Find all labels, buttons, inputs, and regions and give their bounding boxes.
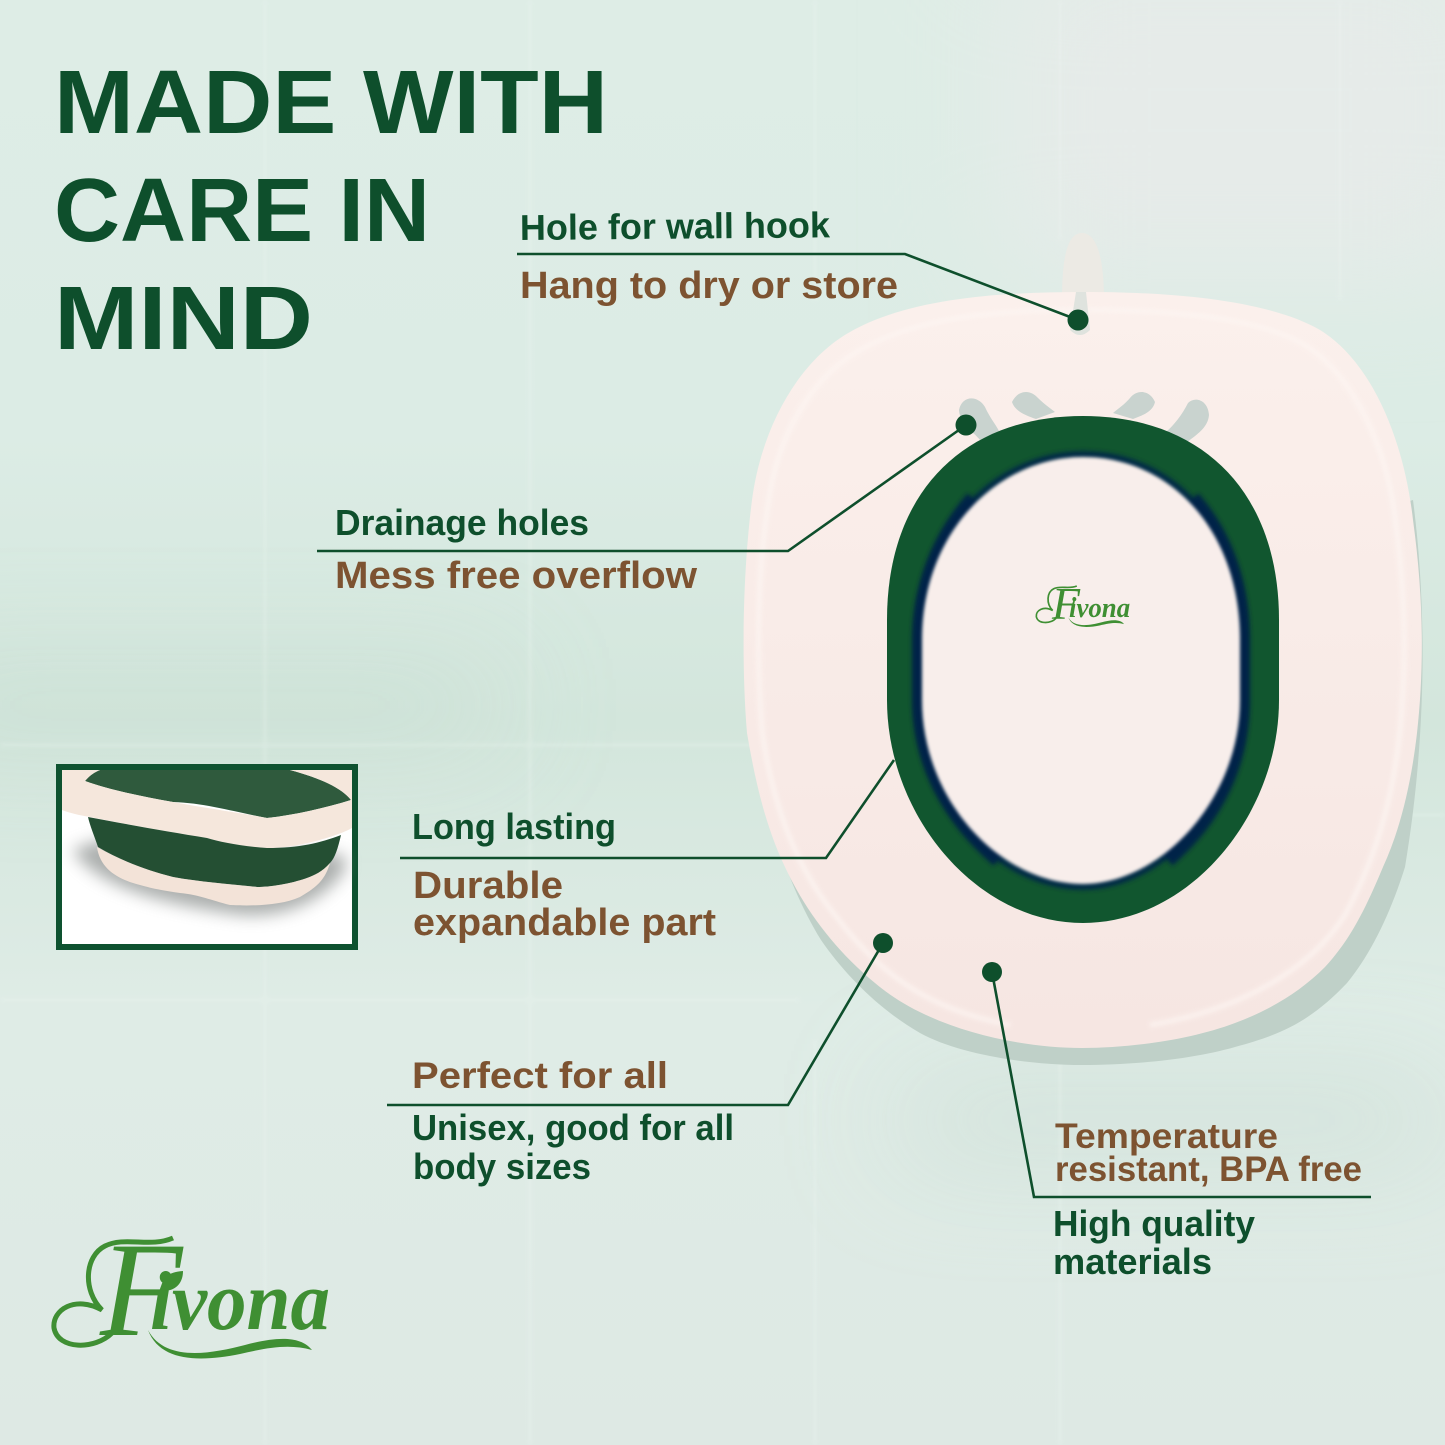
inset green band [88,817,341,887]
inset: collapsed basin side view [59,767,355,947]
callout: hole for wall hook: Hole for wall hook [520,204,831,248]
inset green interior [85,770,351,818]
title: CARE IN [54,161,430,261]
basin rim highlight [759,310,1404,1025]
logo: Fivona: F [99,1216,184,1365]
hook slot [1070,292,1090,335]
basin floor [922,457,1240,884]
callout: perfect for all: Perfect for all [412,1055,668,1096]
callout: perfect for all: Unisex, good for all [412,1107,734,1148]
callout: hole for wall hook: Hang to dry or store [520,265,898,307]
rim: green expandable ring [887,416,1279,923]
inset floor shadow [72,840,345,915]
basin shadow [750,500,1423,1065]
logo flourish [54,1238,173,1345]
callout: long lasting [400,760,894,944]
rim inner dark edge [922,457,1240,884]
inset cream base [97,847,330,905]
callout: hole for wall hook [517,204,1088,330]
callout: high quality materials: Temperature [1055,1117,1278,1156]
callout: high quality materials: High quality [1053,1203,1255,1244]
logo: small Fivona: ivona [1069,593,1130,624]
callout: high quality materials: resistant, BPA free [1055,1150,1362,1189]
product: sitz bath basin [744,233,1423,1065]
logo: small Fivona: F [1051,578,1081,629]
icon: drainage holes [959,392,1209,443]
callout: drainage holes: Mess free overflow [335,555,697,597]
callout: long lasting: Durable [413,865,563,907]
title: MADE WITH [54,53,608,153]
basin body [744,292,1422,1048]
callout: long lasting: expandable part [413,902,716,944]
title: MIND [54,269,313,369]
logo swoosh [148,1330,312,1358]
callout: perfect for all [387,933,893,1187]
title [54,53,608,369]
inset cream rim [62,770,352,848]
logo: small Fivona [1036,578,1130,629]
icon: wall hook [1062,233,1104,300]
rim side shading [922,500,1240,858]
logo: Fivona [54,1216,330,1365]
callout: drainage holes: Drainage holes [335,502,589,543]
callout: drainage holes [317,414,976,597]
callout: high quality materials: materials [1053,1241,1212,1282]
callout: high quality materials [982,962,1371,1282]
callout: long lasting: Long lasting [412,806,616,847]
logo leaf [164,1271,183,1291]
callout: perfect for all: body sizes [413,1146,591,1187]
logo: Fivona: ivona [150,1255,330,1348]
